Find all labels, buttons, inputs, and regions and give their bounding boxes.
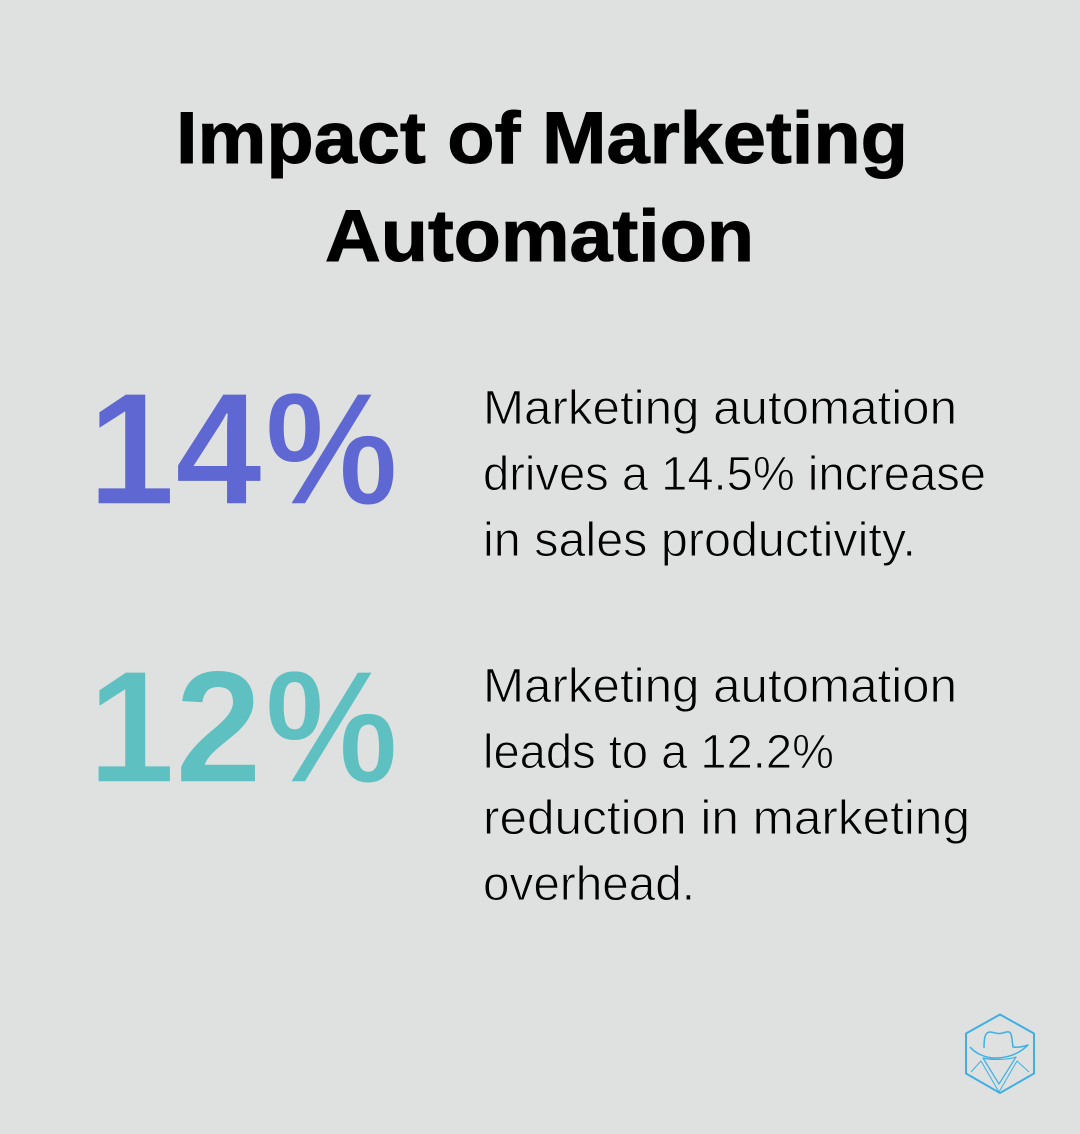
text block: sales productivity [483, 382, 986, 567]
title: Impact of Marketing [176, 98, 908, 179]
text block: sales productivity: in sales productivity. [483, 514, 916, 567]
title [176, 98, 908, 277]
stat: 14% [88, 359, 398, 538]
stat: 14%: % [265, 359, 398, 538]
text block: marketing overhead [483, 660, 970, 911]
text block: sales productivity: drives a 14.5% increase [483, 448, 986, 501]
title: Automation [325, 196, 754, 277]
stat: 14%: 14 [88, 359, 262, 538]
text block: marketing overhead: reduction in marketing [483, 792, 970, 845]
stat: 12%: 12 [88, 637, 262, 816]
text block: marketing overhead: Marketing automation [483, 660, 957, 713]
stat: 12%: % [265, 637, 398, 816]
stat: 12% [88, 637, 398, 816]
text block: marketing overhead: leads to a 12.2% [483, 726, 834, 779]
text block: sales productivity: Marketing automation [483, 382, 957, 435]
text block: marketing overhead: overhead. [483, 858, 695, 911]
icon: hexagon spy logo [966, 1014, 1034, 1093]
